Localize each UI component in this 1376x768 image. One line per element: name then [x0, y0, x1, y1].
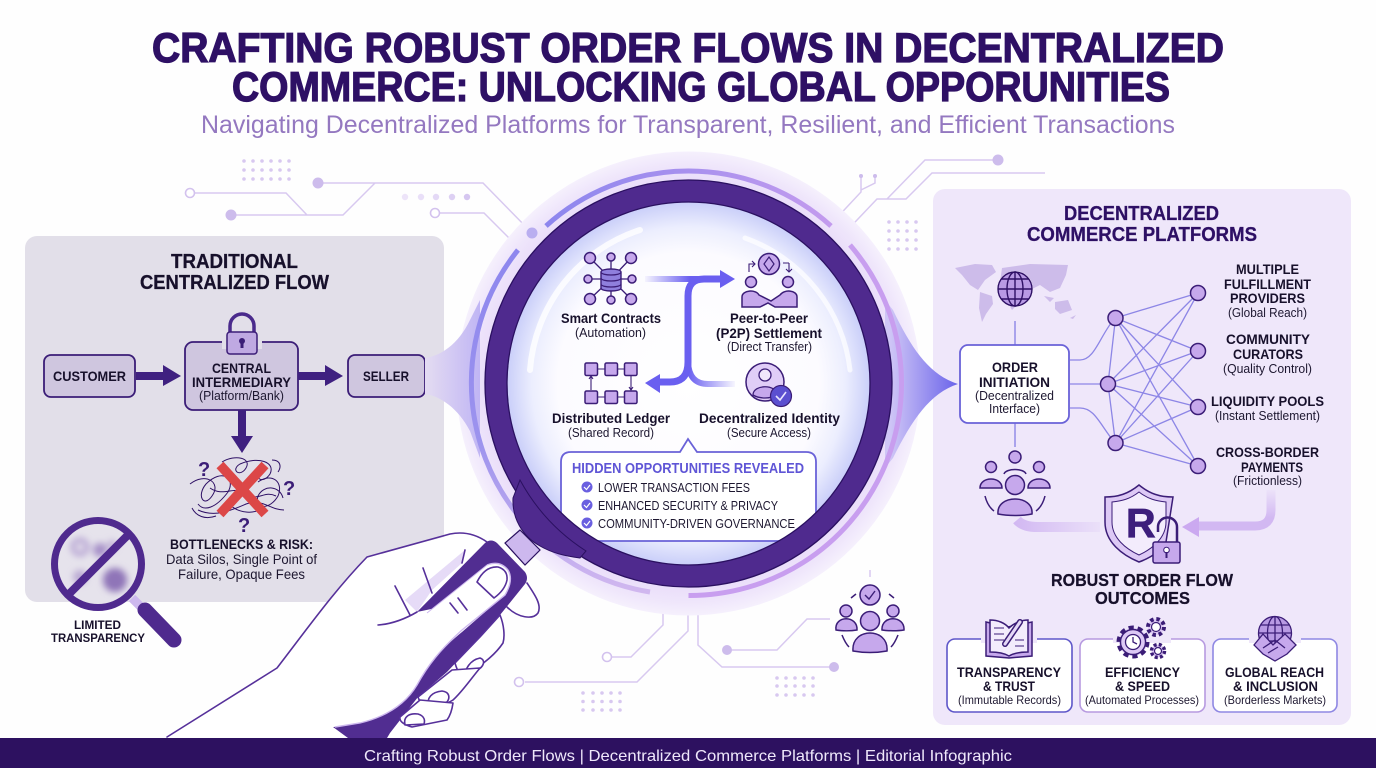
label: cross-border payments — [1216, 444, 1319, 488]
item: community-driven governance: COMMUNITY-DRIVEN GOVERNANCE — [598, 517, 795, 531]
card: transparency and trust: TRANSPARENCY — [957, 664, 1062, 680]
card: efficiency and speed: EFFICIENCY — [1105, 664, 1181, 680]
network diagram — [1070, 286, 1206, 474]
magnifier neck — [505, 530, 540, 565]
icon: gears with clock — [1119, 619, 1164, 658]
label: peer-to-peer settlement: (Direct Transfer) — [727, 340, 812, 354]
icon: world map — [955, 264, 1076, 322]
central intermediary box: CENTRAL — [212, 360, 271, 376]
heading: decentralized commerce — [1027, 203, 1257, 246]
card: global reach and inclusion: (Borderless Markets) — [1224, 693, 1326, 707]
icon: community with checkmark — [836, 585, 904, 652]
label: cross-border payments: (Frictionless) — [1233, 474, 1302, 488]
central intermediary box — [185, 335, 298, 410]
hand back: palm and finger behind handle — [167, 532, 539, 737]
order initiation box: Interface) — [989, 402, 1040, 416]
item: enhanced security and privacy: ENHANCED SECURITY & PRIVACY — [598, 499, 779, 513]
heading: robust order flow outcomes — [1051, 570, 1233, 608]
arrow: down to bottlenecks — [231, 410, 253, 453]
card: efficiency and speed — [1080, 635, 1205, 712]
icon: smart contracts — [584, 252, 636, 304]
label: multiple fulfillment providers: FULFILLMENT — [1224, 276, 1311, 292]
label: multiple fulfillment providers — [1224, 261, 1311, 320]
text: bottlenecks and risk: BOTTLENECKS & RISK: — [170, 536, 313, 552]
label: smart contracts — [561, 310, 661, 340]
heading: decentralized commerce: DECENTRALIZED — [1064, 203, 1219, 225]
label: cross-border payments: PAYMENTS — [1241, 459, 1303, 475]
footer bar: Crafting Robust Order Flows | Decentralized Commerce Platforms | Editorial Infographic — [364, 748, 1012, 765]
icon: decentralized identity — [746, 363, 792, 406]
heading: traditional: TRADITIONAL — [171, 251, 298, 273]
lens halo — [456, 152, 920, 616]
icon: community people — [980, 451, 1050, 516]
label: distributed ledger: Distributed Ledger — [552, 410, 671, 426]
item: lower transaction fees: LOWER TRANSACTION FEES — [598, 481, 750, 495]
seller box — [348, 355, 425, 397]
order initiation box — [960, 345, 1069, 423]
label: multiple fulfillment providers: (Global Reach) — [1228, 306, 1307, 320]
label: limited transparency — [51, 618, 145, 645]
heading: traditional — [140, 251, 329, 294]
item: enhanced security and privacy — [582, 500, 778, 510]
label: community curators — [1223, 331, 1312, 376]
magnifier collar — [513, 480, 586, 558]
heading: robust order flow outcomes: ROBUST ORDER FLOW — [1051, 570, 1233, 590]
hand: thumb — [300, 563, 510, 727]
magnifier ring — [485, 180, 892, 587]
card: transparency and trust: & TRUST — [983, 678, 1035, 694]
customer box — [44, 355, 135, 397]
order initiation box: INITIATION — [979, 374, 1050, 390]
card: global reach and inclusion — [1213, 635, 1337, 712]
label: liquidity pools: (Instant Settlement) — [1215, 409, 1320, 423]
label: community curators: (Quality Control) — [1223, 362, 1312, 376]
arrow: customer to intermediary — [136, 365, 181, 386]
heading: robust order flow outcomes: OUTCOMES — [1095, 588, 1190, 608]
funnel: right beam to order initiation — [885, 300, 958, 468]
title — [152, 24, 1224, 110]
card: transparency and trust — [947, 635, 1072, 712]
label: distributed ledger: (Shared Record) — [568, 426, 654, 440]
text: bottlenecks and risk: Failure, Opaque Fees — [178, 566, 305, 582]
label: community curators: COMMUNITY — [1226, 331, 1311, 347]
label: peer-to-peer settlement — [716, 310, 822, 354]
callout: hidden opportunities revealed: HIDDEN OPPORTUNITIES REVEALED — [572, 461, 804, 477]
circuit traces: upper left — [186, 159, 532, 247]
hand: lower fingers — [400, 615, 504, 727]
label: decentralized identity — [699, 410, 840, 440]
callout: hidden opportunities revealed — [561, 439, 816, 541]
label: multiple fulfillment providers: PROVIDERS — [1230, 290, 1305, 306]
icon: padlock — [227, 314, 257, 354]
arrow: intermediary to seller — [298, 365, 343, 386]
icon: book with chain — [986, 620, 1032, 658]
title: CRAFTING ROBUST ORDER FLOWS IN DECENTRALIZED — [152, 24, 1224, 71]
icon: tangled bottleneck with red cross: ? — [198, 459, 210, 481]
icon: tangled bottleneck with red cross — [190, 458, 295, 537]
card: transparency and trust: (Immutable Records) — [958, 693, 1061, 707]
panel: traditional centralized flow — [25, 236, 444, 602]
label: distributed ledger — [552, 410, 671, 440]
label: community curators: CURATORS — [1233, 346, 1303, 362]
panel: decentralized commerce platforms — [933, 189, 1351, 725]
label: limited transparency: TRANSPARENCY — [51, 631, 145, 645]
icon: tangled bottleneck with red cross: ? — [238, 515, 250, 537]
magnifier lens — [506, 202, 870, 566]
central intermediary box: (Platform/Bank) — [199, 389, 284, 403]
circuit traces: bottom centre — [514, 570, 870, 712]
label: limited transparency: LIMITED — [74, 618, 121, 632]
title: COMMERCE: UNLOCKING GLOBAL OPPORUNITIES — [232, 63, 1170, 110]
footer bar — [0, 738, 1376, 768]
item: lower transaction fees — [582, 482, 750, 492]
icon: globe and handshake — [1254, 616, 1296, 661]
text: bottlenecks and risk — [166, 536, 317, 582]
label: peer-to-peer settlement: Peer-to-Peer — [730, 310, 809, 326]
flow arrows in lens — [645, 270, 735, 393]
subtitle: Navigating Decentralized Platforms for Transparent, Resilient, and Efficient Transactions — [201, 111, 1175, 139]
label: peer-to-peer settlement: (P2P) Settlement — [716, 325, 822, 341]
label: smart contracts: (Automation) — [575, 326, 646, 340]
card: efficiency and speed: & SPEED — [1115, 678, 1170, 694]
heading: traditional: CENTRALIZED FLOW — [140, 272, 329, 294]
icon: shield with R and lock: R — [1126, 500, 1156, 546]
label: smart contracts: Smart Contracts — [561, 310, 661, 326]
order initiation box: (Decentralized — [975, 389, 1054, 403]
seller box: SELLER — [363, 368, 409, 384]
icon: shield with R and lock — [1105, 485, 1180, 563]
central intermediary box: INTERMEDIARY — [192, 374, 292, 390]
icon: globe — [997, 271, 1033, 307]
icon: limited transparency magnifier — [54, 520, 174, 640]
card: global reach and inclusion: & INCLUSION — [1233, 678, 1318, 694]
lens accent arcs — [471, 171, 901, 596]
arrow: from cross-border to shield — [1182, 490, 1271, 537]
label: liquidity pools — [1211, 393, 1324, 423]
connector lines — [1014, 321, 1016, 447]
card: efficiency and speed: (Automated Processes) — [1085, 693, 1199, 707]
card: global reach and inclusion: GLOBAL REACH — [1225, 664, 1324, 680]
label: liquidity pools: LIQUIDITY POOLS — [1211, 393, 1324, 409]
icon: peer-to-peer settlement — [742, 254, 797, 307]
label: multiple fulfillment providers: MULTIPLE — [1236, 261, 1299, 277]
circuit traces: upper right — [832, 154, 1045, 251]
label: decentralized identity: (Secure Access) — [727, 426, 811, 440]
item: community-driven governance — [582, 518, 794, 528]
magnifier handle — [333, 540, 527, 738]
customer box: CUSTOMER — [53, 368, 126, 384]
text: bottlenecks and risk: Data Silos, Single Point of — [166, 551, 317, 567]
icon: distributed ledger — [585, 363, 637, 404]
heading: decentralized commerce: COMMERCE PLATFORMS — [1027, 224, 1257, 246]
label: cross-border payments: CROSS-BORDER — [1216, 444, 1319, 460]
label: decentralized identity: Decentralized Identity — [699, 410, 840, 426]
order initiation box: ORDER — [992, 359, 1038, 375]
icon: tangled bottleneck with red cross: ? — [283, 478, 295, 500]
arrow: from community to shield — [1017, 520, 1100, 527]
funnel: left beam from seller — [425, 300, 480, 458]
